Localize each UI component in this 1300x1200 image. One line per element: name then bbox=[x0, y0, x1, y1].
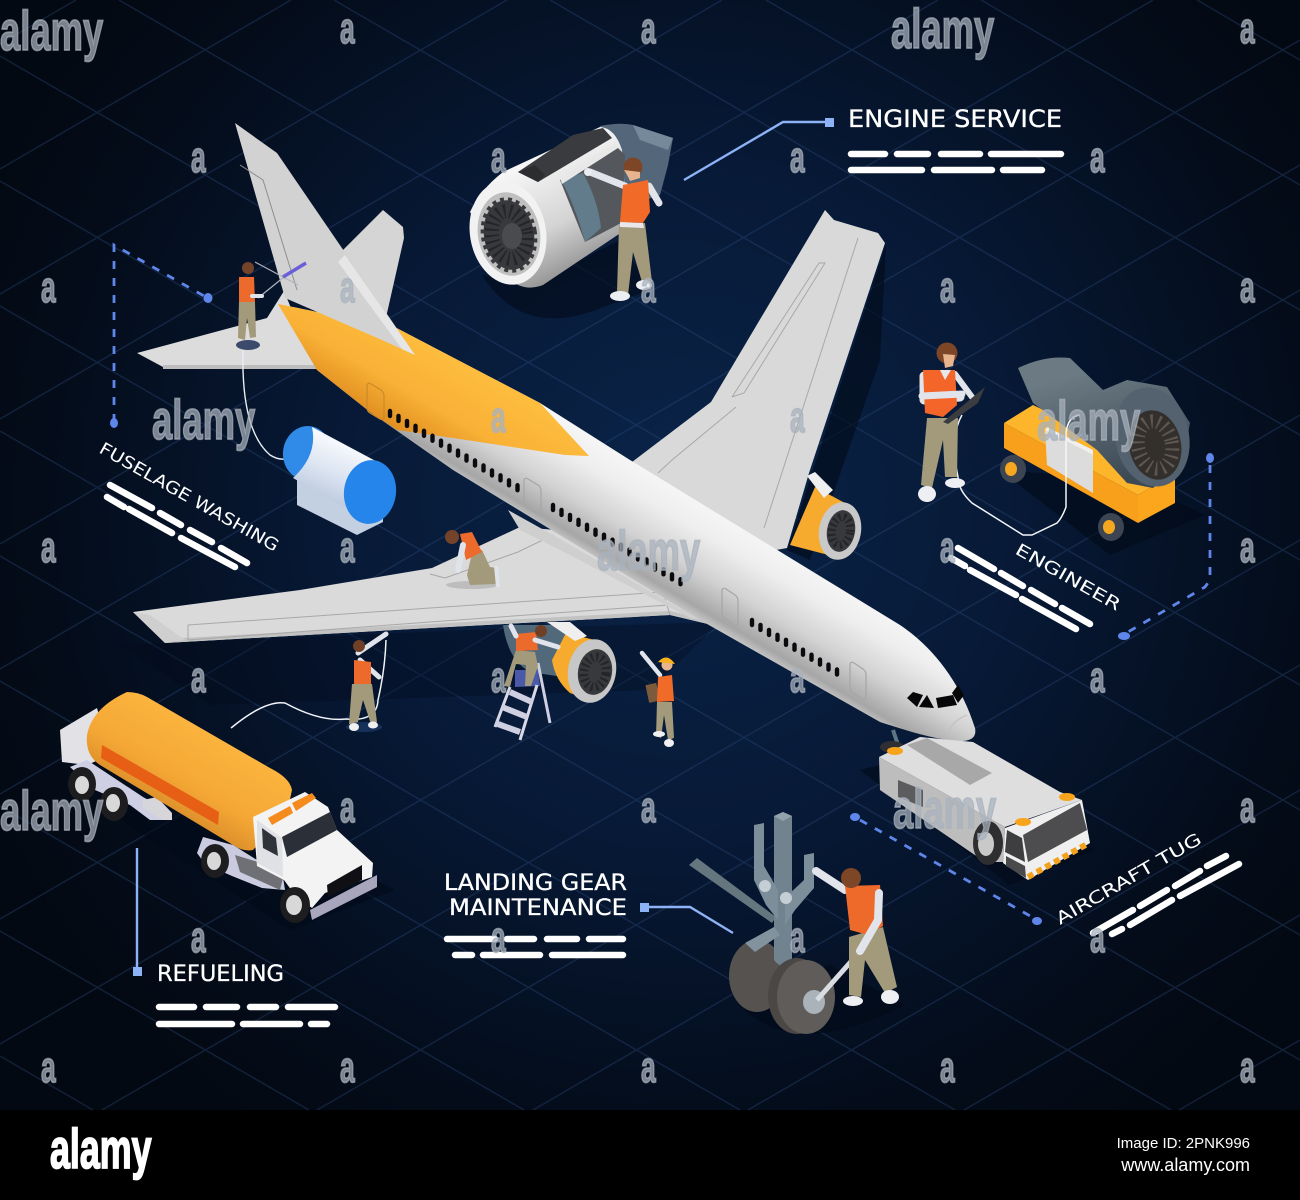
grey box bbox=[1045, 430, 1093, 493]
alamy watermarks: alamy bbox=[152, 389, 255, 452]
connector: fuselage washing bbox=[110, 245, 212, 428]
alamy watermarks: a bbox=[641, 782, 656, 832]
alamy watermarks: a bbox=[1090, 652, 1105, 702]
tug top bbox=[879, 737, 1082, 827]
fuselage bbox=[278, 304, 975, 741]
cab bbox=[253, 792, 373, 908]
footer logo: alamy bbox=[50, 1117, 152, 1180]
lower bracket bbox=[745, 927, 780, 952]
engineer figure bbox=[918, 342, 985, 502]
cart wheels bbox=[1000, 455, 1026, 483]
passenger windows bbox=[390, 411, 837, 675]
heading line 2: MAINTENANCE bbox=[449, 896, 627, 921]
text placeholder lines: engineer bbox=[951, 548, 1090, 629]
fan bbox=[478, 196, 540, 274]
alamy watermarks: a bbox=[1240, 782, 1255, 832]
worker: kneeling on wing bbox=[445, 530, 498, 589]
truck rear box bbox=[60, 708, 110, 765]
nose gear bbox=[893, 730, 898, 745]
alamy watermarks: a bbox=[340, 1042, 355, 1092]
text placeholder lines: refueling bbox=[159, 1007, 335, 1024]
heading: engine service: ENGINE SERVICE bbox=[848, 105, 1062, 133]
alamy watermarks: a bbox=[641, 3, 656, 53]
chassis bbox=[70, 760, 172, 820]
alamy watermarks: a bbox=[41, 522, 56, 572]
landing gear assembly bbox=[689, 812, 835, 1034]
image id: Image ID: 2PNK996 bbox=[1117, 1135, 1250, 1152]
worker: under wing with hose bbox=[231, 634, 386, 732]
nose detail bbox=[948, 715, 967, 735]
text placeholder lines: landing gear bbox=[447, 939, 623, 955]
worker on ladder bbox=[495, 625, 558, 740]
belly fairing bbox=[508, 510, 700, 620]
test engine bbox=[1018, 357, 1190, 488]
alamy watermarks: a bbox=[1090, 132, 1105, 182]
alamy watermarks: alamy bbox=[1037, 390, 1140, 453]
panel: refueling bbox=[60, 692, 377, 1024]
tug side bbox=[879, 757, 1005, 862]
far wing bbox=[632, 210, 885, 552]
worker: supervisor with helmet bbox=[642, 653, 675, 747]
connector: aircraft tug bbox=[850, 813, 1042, 925]
alamy watermarks: a bbox=[790, 652, 805, 702]
alamy watermarks: a bbox=[340, 3, 355, 53]
alamy watermarks: alamy bbox=[0, 780, 103, 843]
cart platform bbox=[1004, 405, 1175, 495]
alamy watermarks: alamy bbox=[891, 0, 994, 61]
fork bbox=[754, 823, 778, 920]
alamy watermarks: a bbox=[1240, 522, 1255, 572]
wheel front bbox=[768, 958, 826, 1034]
alamy watermarks: a bbox=[340, 522, 355, 572]
text placeholder lines: aircraft tug bbox=[1093, 856, 1239, 934]
alamy watermarks: a bbox=[940, 1042, 955, 1092]
alamy watermarks: a bbox=[491, 912, 506, 962]
ground shadows bbox=[90, 240, 1205, 1034]
heading: engineer: ENGINEER bbox=[1012, 540, 1124, 616]
alamy watermarks: a bbox=[790, 132, 805, 182]
heading: refueling: REFUELING bbox=[157, 962, 284, 987]
alamy watermarks: a bbox=[790, 912, 805, 962]
engine test cart bbox=[954, 357, 1199, 541]
doors bbox=[367, 383, 866, 700]
alamy watermarks: a bbox=[1240, 1042, 1255, 1092]
tug front bbox=[1003, 800, 1090, 880]
top grille bbox=[907, 738, 992, 785]
text placeholder lines: fuselage washing bbox=[107, 485, 247, 567]
alamy watermarks: a bbox=[491, 132, 506, 182]
beacons bbox=[887, 747, 903, 755]
engine nose cone bbox=[600, 124, 673, 205]
connector: engineer bbox=[1118, 453, 1214, 640]
connector: refueling bbox=[133, 848, 142, 976]
wheel rear bbox=[729, 940, 785, 1012]
text placeholder lines: engine service bbox=[851, 154, 1061, 170]
hazard stripe bbox=[1028, 843, 1089, 877]
cable bbox=[954, 415, 1080, 535]
alamy watermarks: a bbox=[340, 782, 355, 832]
alamy watermarks: a bbox=[41, 1042, 56, 1092]
footer url: www.alamy.com bbox=[1120, 1155, 1250, 1175]
connector: engine service bbox=[684, 118, 834, 180]
cockpit windshield bbox=[907, 685, 964, 708]
alamy watermarks: a bbox=[790, 392, 805, 442]
vertical fin bbox=[235, 123, 415, 355]
worker: fuselage washing bbox=[236, 262, 306, 459]
alamy watermarks: a bbox=[191, 652, 206, 702]
fuel tank bbox=[87, 692, 292, 850]
far stabilizer bbox=[340, 210, 404, 322]
nose wheel bbox=[880, 741, 904, 753]
technician: engine service bbox=[584, 158, 659, 301]
near wing bbox=[133, 527, 708, 643]
near engine bbox=[503, 622, 621, 707]
tool box bbox=[143, 797, 172, 820]
cab chassis bbox=[197, 837, 285, 890]
heading: aircraft tug: AIRCRAFT TUG bbox=[1052, 830, 1205, 929]
top panel bbox=[518, 128, 612, 182]
alamy watermarks: a bbox=[940, 262, 955, 312]
alamy watermarks: alamy bbox=[0, 0, 103, 63]
alamy watermarks: a bbox=[641, 1042, 656, 1092]
rear wheels bbox=[68, 767, 96, 801]
panel: engine service bbox=[684, 105, 1062, 180]
alamy watermarks: a bbox=[1090, 912, 1105, 962]
water tank bbox=[279, 423, 400, 535]
alamy watermarks: a bbox=[1240, 3, 1255, 53]
technician: landing gear bbox=[816, 868, 899, 1006]
footer bar bbox=[0, 1110, 1300, 1200]
connector: landing gear bbox=[640, 903, 733, 933]
alamy watermarks: a bbox=[940, 522, 955, 572]
alamy watermarks: a bbox=[1240, 262, 1255, 312]
alamy watermarks: a bbox=[491, 652, 506, 702]
panel: fuselage washing bbox=[96, 245, 282, 567]
heading: landing gear maintenance: LANDING GEAR bbox=[444, 871, 627, 896]
alamy watermarks: a bbox=[641, 262, 656, 312]
column bbox=[774, 812, 792, 966]
alamy watermarks: a bbox=[491, 392, 506, 442]
engine front face bbox=[462, 175, 554, 291]
alamy watermarks: alamy bbox=[893, 778, 996, 841]
alamy watermarks: a bbox=[191, 132, 206, 182]
heading: fuselage washing: FUSELAGE WASHING bbox=[96, 439, 282, 556]
yellow livery bbox=[278, 304, 589, 456]
tug vehicle bbox=[879, 737, 1090, 880]
panel: airplane bbox=[133, 123, 975, 745]
alamy watermarks: a bbox=[340, 262, 355, 312]
alamy watermarks: a bbox=[191, 912, 206, 962]
engine cowl bbox=[470, 127, 628, 288]
panel: aircraft tug bbox=[850, 737, 1239, 934]
alamy watermarks: a bbox=[41, 262, 56, 312]
strut side arm bbox=[689, 858, 776, 923]
alamy watermarks: alamy bbox=[597, 520, 700, 583]
open service bay bbox=[560, 145, 625, 242]
near stabilizer bbox=[137, 291, 323, 367]
tug wheel bbox=[973, 821, 1003, 865]
illustration: engine with technician bbox=[462, 124, 673, 301]
panel: engineer bbox=[918, 342, 1214, 640]
far engine bbox=[790, 472, 866, 563]
panel: landing gear maintenance bbox=[444, 812, 899, 1034]
fuel truck bbox=[60, 692, 377, 923]
